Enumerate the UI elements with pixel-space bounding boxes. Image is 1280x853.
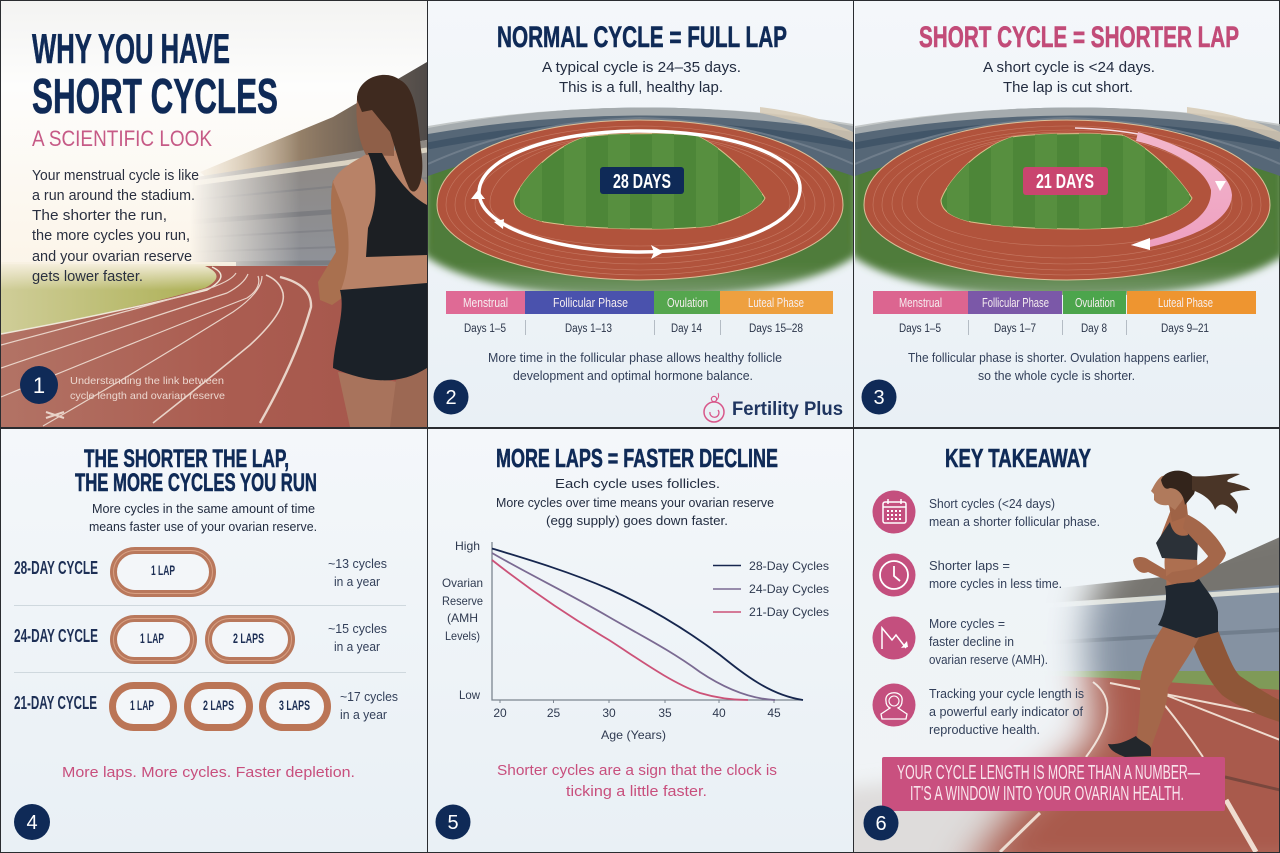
takeaway 1: mean a shorter follicular phase. (929, 514, 1100, 529)
explanation (488, 350, 782, 383)
intro text (32, 168, 199, 285)
badge 4 (14, 804, 50, 840)
axis labels: Levels) (445, 629, 480, 643)
closing message: Shorter cycles are a sign that the clock is (497, 763, 777, 779)
legend: 21-Day Cycles (749, 605, 829, 619)
curve: 28-day cycles (492, 548, 803, 700)
badge 2 (434, 380, 468, 414)
closing message: ticking a little faster. (566, 784, 707, 800)
phase bar: Menstrual (899, 295, 942, 310)
phase bar: Ovulation (1075, 295, 1115, 310)
phase bar: Ovulation (667, 295, 708, 310)
subheading: More cycles in the same amount of time (92, 501, 315, 516)
legend: 24-Day Cycles (749, 582, 829, 596)
curve: 24-day cycles (492, 553, 775, 700)
row: 28-day cycle (14, 550, 387, 594)
shortened lap arrow (1075, 128, 1232, 250)
intro text: Your menstrual cycle is like (32, 168, 199, 184)
athlete seen from behind (318, 75, 427, 427)
axis labels: 20 (493, 706, 507, 720)
stadium illustration (424, 107, 857, 298)
phase days: Days 1–7 (994, 323, 1036, 335)
phase days: Days 1–5 (899, 323, 941, 335)
title: WHY YOU HAVE (32, 25, 230, 72)
heading (75, 445, 317, 497)
axis labels: Reserve (442, 594, 483, 608)
row: 21-day cycle: 1 LAP (130, 697, 154, 713)
row: 24-day cycle: 2 LAPS (233, 630, 264, 646)
phase days (464, 320, 803, 335)
badge 6: 6 (875, 813, 887, 835)
icon: declining chart (872, 616, 916, 660)
28 days label (600, 167, 684, 194)
phase days: Day 14 (671, 323, 703, 335)
explanation: so the whole cycle is shorter. (978, 368, 1135, 383)
badge 3: 3 (873, 387, 885, 409)
explanation: development and optimal hormone balance. (513, 368, 753, 383)
subheading (496, 476, 774, 528)
subheading: The lap is cut short. (1003, 79, 1133, 96)
curve: 21-day cycles (492, 560, 748, 700)
badge 4: 4 (26, 812, 38, 834)
row: 24-day cycle: 1 LAP (140, 630, 164, 646)
badge 2: 2 (445, 387, 457, 409)
row: 21-day cycle: 21-DAY CYCLE (14, 693, 97, 713)
badge 6 (864, 806, 898, 840)
intro text: gets lower faster. (32, 269, 143, 285)
row: 21-day cycle (14, 686, 398, 728)
axis labels: Ovarian (442, 576, 483, 590)
row: 24-day cycle (14, 618, 387, 660)
phase bar: Luteal Phase (1158, 295, 1213, 310)
stadium illustration (851, 107, 1280, 298)
panel 4: more cycles (1, 429, 427, 852)
intro text: a run around the stadium. (32, 188, 195, 204)
phase days (899, 320, 1209, 335)
subheading: A typical cycle is 24–35 days. (542, 59, 741, 76)
takeaway 3: faster decline in (929, 634, 1014, 649)
phase days: Day 8 (1081, 323, 1107, 335)
subheading: Each cycle uses follicles. (555, 476, 720, 491)
subheading: A short cycle is <24 days. (983, 59, 1155, 76)
row: 24-day cycle: in a year (334, 639, 381, 654)
panel 6: key takeaway (830, 429, 1280, 853)
full lap arrow (471, 131, 800, 259)
heading: NORMAL CYCLE = FULL LAP (497, 21, 787, 54)
row: 21-day cycle: 3 LAPS (279, 697, 310, 713)
row: 24-day cycle: 24-DAY CYCLE (14, 626, 98, 646)
takeaway 1 (929, 496, 1100, 529)
takeaway 1: Short cycles (<24 days) (929, 496, 1055, 511)
explanation (908, 350, 1209, 383)
panel 3: short cycle (851, 1, 1280, 427)
intro text: and your ovarian reserve (32, 249, 192, 265)
logo: fertility plus (704, 393, 843, 422)
heading: THE MORE CYCLES YOU RUN (75, 469, 317, 497)
takeaway 2: Shorter laps = (929, 558, 1010, 573)
row: 28-day cycle: ~13 cycles (328, 556, 387, 571)
takeaway 3: More cycles = (929, 616, 1005, 631)
subheading (983, 59, 1155, 96)
phase bar (873, 291, 1256, 314)
row: 24-day cycle: ~15 cycles (328, 621, 387, 636)
heading: MORE LAPS = FASTER DECLINE (496, 443, 778, 473)
closing message (497, 763, 777, 800)
panel 5: faster decline (428, 429, 853, 852)
21 days label: 21 DAYS (1036, 171, 1094, 193)
icon: person (872, 684, 916, 726)
explanation: The follicular phase is shorter. Ovulation happens earlier, (908, 350, 1209, 365)
subheading: (egg supply) goes down faster. (546, 513, 728, 528)
28 days label: 28 DAYS (613, 171, 671, 193)
axis labels: 45 (767, 706, 781, 720)
axis labels: Age (Years) (601, 728, 666, 742)
row: 21-day cycle: in a year (340, 707, 388, 722)
axis labels: 40 (712, 706, 726, 720)
subheading (542, 59, 741, 96)
badge 3 (862, 380, 896, 414)
runner (1108, 471, 1280, 757)
row: 21-day cycle: 2 LAPS (203, 697, 234, 713)
caption: Understanding the link between (70, 375, 224, 387)
badge 5: 5 (447, 812, 459, 834)
takeaway 2 (929, 558, 1062, 591)
subheading: More cycles over time means your ovarian reserve (496, 495, 774, 510)
takeaway 2: more cycles in less time. (929, 576, 1062, 591)
takeaway 4: a powerful early indicator of (929, 704, 1083, 719)
phase bar: Follicular Phase (553, 295, 628, 310)
icon: calendar (872, 490, 916, 534)
axis labels: 35 (658, 706, 672, 720)
row: 28-day cycle: in a year (334, 574, 381, 589)
phase days: Days 9–21 (1161, 323, 1209, 335)
axis labels (442, 539, 781, 742)
axis labels: 30 (602, 706, 616, 720)
legend (713, 559, 829, 619)
subheading (89, 501, 317, 534)
closing message: More laps. More cycles. Faster depletion. (62, 764, 355, 781)
phase bar: Menstrual (463, 295, 508, 310)
row: 21-day cycle: ~17 cycles (340, 689, 398, 704)
phase bar: Luteal Phase (748, 295, 804, 310)
phase days: Days 1–13 (565, 323, 612, 335)
subtitle: A SCIENTIFIC LOOK (32, 126, 212, 151)
badge 1: 1 (33, 373, 45, 398)
21 days label (1023, 167, 1108, 195)
row: 28-day cycle: 1 LAP (151, 562, 175, 578)
banner (882, 757, 1225, 811)
subheading: This is a full, healthy lap. (559, 79, 723, 96)
caption: cycle length and ovarian reserve (70, 390, 225, 402)
legend: 28-Day Cycles (749, 559, 829, 573)
heading: KEY TAKEAWAY (945, 443, 1091, 473)
heading: THE SHORTER THE LAP, (84, 445, 289, 473)
takeaway 4: reproductive health. (929, 722, 1040, 737)
badge 5 (436, 804, 470, 840)
phase days: Days 1–5 (464, 323, 506, 335)
icon: clock (872, 554, 916, 596)
phase days: Days 15–28 (749, 323, 803, 335)
panel 1: why you have short cycles (1, 1, 427, 427)
phase bar: Follicular Phase (982, 295, 1049, 310)
line chart: ovarian reserve by age (442, 539, 829, 742)
badge 1 (20, 366, 58, 404)
takeaway 4: Tracking your cycle length is (929, 686, 1084, 701)
takeaway 3 (929, 616, 1048, 667)
logo: fertility plus: Fertility Plus (732, 399, 843, 420)
axis labels: 25 (547, 706, 560, 720)
explanation: More time in the follicular phase allows healthy follicle (488, 350, 782, 365)
takeaway 3: ovarian reserve (AMH). (929, 652, 1048, 667)
axis labels: High (455, 539, 480, 553)
takeaway 4 (929, 686, 1084, 737)
panel 2: normal cycle (424, 1, 857, 427)
row: 28-day cycle: 28-DAY CYCLE (14, 558, 98, 578)
subheading: means faster use of your ovarian reserve. (89, 519, 317, 534)
title (32, 25, 278, 124)
axis labels: Low (459, 688, 480, 702)
caption (70, 375, 225, 402)
phase bar (446, 291, 833, 314)
axis labels: (AMH (447, 611, 478, 625)
title: SHORT CYCLES (32, 70, 278, 124)
intro text: The shorter the run, (32, 208, 167, 224)
intro text: the more cycles you run, (32, 228, 190, 244)
